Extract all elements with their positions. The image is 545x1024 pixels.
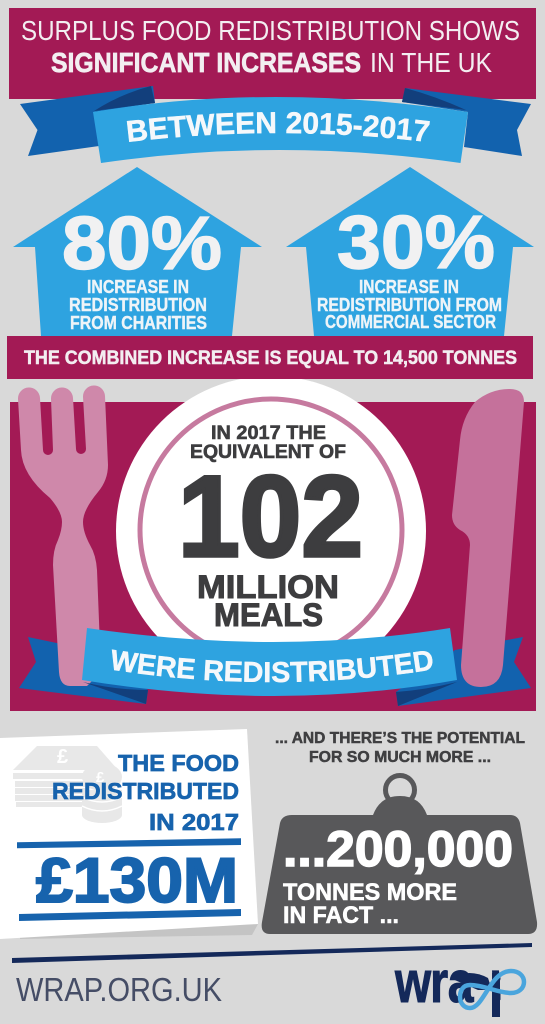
logo: wrap [394, 968, 526, 1017]
card: food value: REDISTRIBUTED [52, 778, 239, 804]
ribbon tails: were redistributed [19, 637, 531, 706]
title banner: IN THE UK [370, 47, 492, 78]
house: 30% [286, 167, 534, 336]
ribbon: between 2015-2017 [20, 86, 531, 163]
icon: weight: ...200,000 [283, 821, 513, 877]
icon: pound notes and coins: £ [57, 746, 68, 768]
card: food value: THE FOOD [118, 750, 239, 776]
house: 80%: INCREASE IN [87, 277, 189, 297]
title banner: SIGNIFICANT INCREASES [51, 47, 361, 78]
plate [116, 376, 426, 686]
icon: knife [452, 389, 524, 687]
footer rule [12, 943, 532, 963]
plate text: MILLION [197, 569, 339, 605]
ribbon: were redistributed: WERE REDISTRIBUTED [112, 649, 432, 682]
house: 80%: FROM CHARITIES [70, 313, 207, 333]
icon: weight [262, 776, 537, 934]
banner: combined increase: THE COMBINED INCREASE IS EQUAL TO 14,500 TONNES [24, 348, 517, 369]
ribbon: were redistributed [82, 628, 457, 706]
card: food value: IN 2017 [149, 809, 239, 835]
house: 80% [13, 167, 262, 336]
house: 30%: REDISTRIBUTION FROM [317, 295, 502, 315]
icon: fork [18, 385, 108, 686]
card: food value [0, 729, 258, 939]
ribbon: between 2015-2017: BETWEEN 2015-2017 [126, 112, 430, 142]
icon: pound notes and coins [13, 746, 122, 823]
card: food value: £130M [36, 846, 238, 916]
plate text: 102 [178, 453, 363, 581]
potential text: FOR SO MUCH MORE ... [309, 749, 491, 766]
panel: meals background [10, 402, 536, 711]
icon: pound notes and coins: £ [96, 769, 105, 786]
plate text: IN 2017 THE [211, 423, 326, 444]
title banner [9, 8, 536, 99]
banner: combined increase [7, 336, 533, 379]
card shadow [20, 924, 258, 939]
plate text: EQUIVALENT OF [190, 442, 346, 463]
website: WRAP.ORG.UK [16, 971, 222, 1008]
house: 30%: INCREASE IN [359, 277, 459, 297]
house: 30%: COMMERCIAL SECTOR [325, 312, 496, 332]
house: 80%: 80% [62, 201, 222, 285]
logo: wrap: wrap [394, 950, 518, 1015]
house: 80%: REDISTRIBUTION [69, 295, 207, 315]
icon: weight: IN FACT ... [283, 902, 399, 929]
potential text [275, 730, 525, 766]
icon: weight: TONNES MORE [283, 879, 457, 906]
plate text [178, 423, 363, 633]
house: 30%: 30% [337, 200, 495, 284]
plate text: MEALS [214, 597, 323, 633]
potential text: ... AND THERE’S THE POTENTIAL [275, 730, 525, 747]
